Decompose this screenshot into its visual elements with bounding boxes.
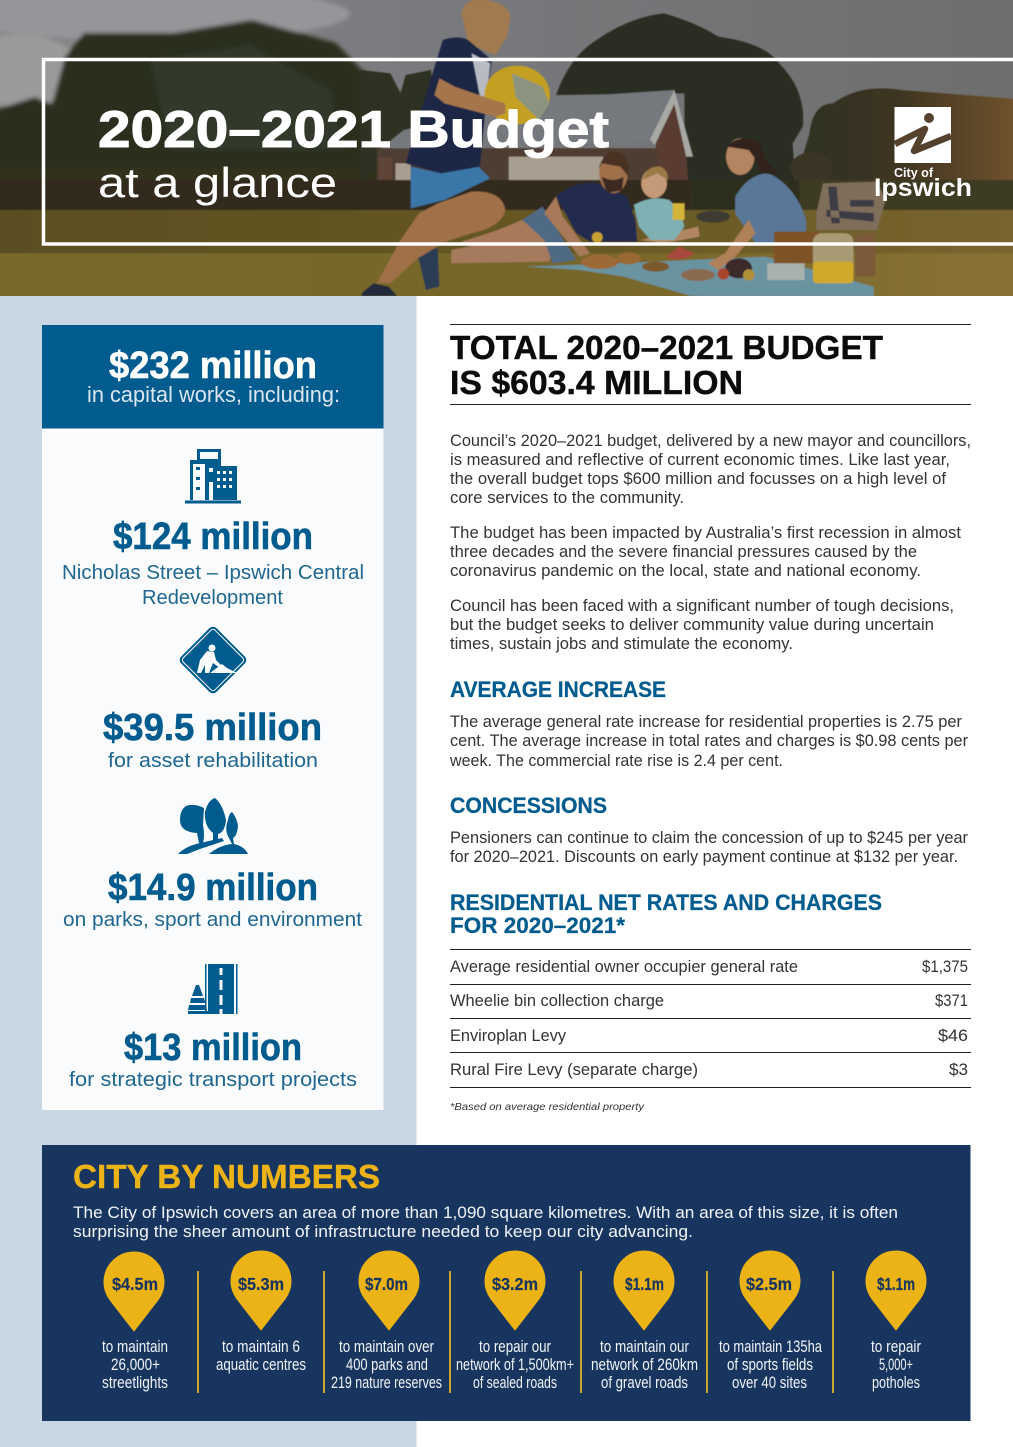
item: $124 million	[62, 516, 364, 609]
woman	[696, 211, 730, 223]
stat: gravel roads: $1.1m	[625, 1274, 664, 1294]
stat: gravel roads: of gravel roads	[601, 1373, 688, 1392]
section: concessions: Pensioners can continue to claim the concession of up to $245 per year	[450, 829, 968, 847]
panel: capital works items	[42, 428, 384, 1110]
heading: city by numbers: CITY BY NUMBERS	[73, 1158, 380, 1195]
stat: potholes: $1.1m	[877, 1274, 915, 1294]
stat: streetlights: $4.5m	[112, 1274, 158, 1294]
footnote: *Based on average residential property	[450, 1101, 645, 1113]
text block: intro paragraphs: The budget has been impacted by Australia’s first recession in almost	[450, 524, 961, 542]
item: $14.9 million: $14.9 million	[108, 867, 318, 909]
stat: sealed roads: $3.2m	[492, 1274, 538, 1294]
heading: residential net rates: FOR 2020–2021*	[450, 913, 625, 938]
text block: intro paragraphs: but the budget seeks to deliver community value during uncertain	[450, 616, 934, 634]
house gable trim	[650, 90, 693, 157]
stat: potholes: potholes	[872, 1373, 920, 1392]
section: average increase: The average general rate increase for residential properties is 2.75 per	[450, 713, 962, 731]
section: average increase: AVERAGE INCREASE	[450, 677, 666, 702]
icon: road and cone	[188, 964, 238, 1014]
logo: City of Ipswich	[874, 107, 972, 202]
house gable	[655, 104, 688, 181]
boy	[417, 248, 439, 290]
heading: total budget: TOTAL 2020–2021 BUDGET	[450, 329, 883, 366]
item: $124 million: $124 million	[113, 516, 313, 558]
icon: city buildings	[185, 449, 241, 504]
item: $124 million: Nicholas Street – Ipswich Central	[62, 561, 364, 584]
stat: gravel roads	[591, 1251, 698, 1392]
stat: streetlights: 26,000+	[111, 1355, 160, 1374]
item: $14.9 million: on parks, sport and environment	[63, 908, 362, 931]
table: rates and charges: $3	[949, 1061, 968, 1079]
logo: City of Ipswich: Ipswich	[874, 174, 972, 202]
item: $13 million	[69, 1027, 357, 1091]
left trees	[0, 20, 410, 180]
stat: sports fields: $2.5m	[746, 1274, 792, 1294]
section: average increase	[449, 677, 968, 770]
stat: streetlights: to maintain	[102, 1337, 168, 1356]
section: average increase: week. The commercial rate rise is 2.4 per cent.	[449, 752, 783, 770]
text block: intro paragraphs: coronavirus pandemic on the local, state and national economy.	[450, 562, 921, 580]
section: concessions	[450, 793, 968, 866]
hedge	[0, 172, 378, 180]
stat: potholes: to repair	[871, 1337, 921, 1356]
table: rates and charges: $371	[935, 992, 968, 1010]
section: concessions: for 2020–2021. Discounts on early payment continue at $132 per year.	[450, 848, 958, 866]
header frame	[44, 60, 1013, 244]
foreground hedge	[0, 180, 691, 210]
stat: parks and nature reserves	[331, 1251, 442, 1392]
heading: residential net rates	[450, 890, 882, 938]
man	[451, 233, 553, 263]
logo: City of Ipswich: City of	[894, 166, 934, 180]
stat: sports fields: over 40 sites	[732, 1373, 807, 1392]
item: $13 million: $13 million	[124, 1027, 302, 1069]
text block: intro paragraphs: three decades and the severe financial pressures caused by the	[450, 543, 917, 561]
photo centre, drawn at crop scale	[0, 0, 1013, 300]
item: $14.9 million	[63, 867, 362, 931]
panel: capital works header	[42, 325, 384, 428]
stat: aquatic centres: $5.3m	[238, 1274, 284, 1294]
stat: sports fields	[719, 1251, 822, 1392]
table: rates and charges: Enviroplan Levy	[450, 1027, 567, 1045]
stat: gravel roads: network of 260km	[591, 1355, 698, 1374]
food	[581, 254, 619, 269]
stat: potholes	[866, 1251, 926, 1392]
text block: intro paragraphs: core services to the community.	[450, 489, 684, 507]
house wall	[376, 148, 658, 181]
table: rates and charges: Average residential owner occupier general rate	[450, 958, 798, 976]
background trees	[360, 70, 432, 148]
stat: sealed roads: to repair our	[479, 1337, 551, 1356]
stat: sealed roads: network of 1,500km+	[456, 1355, 574, 1374]
stat: streetlights	[102, 1252, 168, 1392]
near lawn	[0, 210, 1013, 257]
stat: parks and nature reserves: 219 nature reserves	[331, 1373, 442, 1392]
section: average increase: cent. The average increase in total rates and charges is $0.98 cents per	[450, 732, 968, 750]
header photo: family picnic in park	[0, 0, 1013, 300]
heading: total budget	[450, 324, 971, 405]
child	[641, 227, 700, 243]
item: $124 million: Redevelopment	[142, 586, 283, 609]
table: rates and charges: $46	[938, 1027, 968, 1045]
stat: parks and nature reserves: to maintain over	[339, 1337, 434, 1356]
text block: intro paragraphs: Council has been faced with a significant number of tough decisions,	[450, 597, 954, 615]
stat: aquatic centres	[216, 1251, 306, 1374]
table: rates and charges: Wheelie bin collection charge	[450, 992, 664, 1010]
heading: total budget: IS $603.4 MILLION	[450, 364, 743, 401]
stat: potholes: 5,000+	[879, 1355, 913, 1374]
stat: sports fields: to maintain 135ha	[719, 1337, 822, 1356]
house roof	[379, 90, 674, 150]
hamper	[816, 182, 886, 230]
text block: intro paragraphs: is measured and reflective of current economic times. Like last year,	[450, 451, 950, 469]
table: rates and charges	[450, 949, 971, 1088]
stat: parks and nature reserves: $7.0m	[365, 1274, 408, 1294]
text block: city intro	[73, 1203, 898, 1241]
subtitle: at a glance	[98, 159, 337, 206]
stat: aquatic centres: to maintain 6	[222, 1337, 300, 1356]
stat: streetlights: streetlights	[102, 1373, 168, 1392]
item: $39.5 million	[103, 707, 322, 772]
stat: aquatic centres: aquatic centres	[216, 1355, 306, 1374]
stat: parks and nature reserves: 400 parks and	[346, 1355, 428, 1374]
stat: sealed roads: of sealed roads	[473, 1373, 557, 1392]
panel: capital works header: $232 million	[109, 345, 317, 387]
item: $39.5 million: $39.5 million	[103, 707, 322, 749]
item: $13 million: for strategic transport projects	[69, 1068, 357, 1091]
panel: city by numbers	[42, 1145, 970, 1421]
stat: gravel roads: to maintain our	[600, 1337, 689, 1356]
icon: road worker sign	[178, 625, 248, 695]
heading: residential net rates: RESIDENTIAL NET RATES AND CHARGES	[450, 890, 882, 915]
title: 2020–2021 Budget	[98, 101, 609, 159]
text block: intro paragraphs: the overall budget tops $600 million and focusses on a high level of	[450, 470, 946, 488]
item: $39.5 million: for asset rehabilitation	[108, 749, 318, 772]
icon: trees	[178, 798, 248, 854]
juice jug	[812, 232, 854, 265]
picnic blanket	[526, 257, 874, 296]
text block: city intro: surprising the sheer amount of infrastructure needed to keep our city advancing.	[73, 1222, 693, 1241]
stat: sports fields: of sports fields	[727, 1355, 813, 1374]
text block: intro paragraphs: times, sustain jobs and stimulate the economy.	[450, 635, 793, 653]
panel: capital works header: in capital works, including:	[87, 382, 340, 407]
section: concessions: CONCESSIONS	[450, 793, 607, 818]
text block: intro paragraphs	[450, 432, 971, 653]
table: rates and charges: $1,375	[922, 958, 968, 976]
text block: intro paragraphs: Council’s 2020–2021 budget, delivered by a new mayor and councillors,	[450, 432, 971, 450]
table: rates and charges: Rural Fire Levy (separate charge)	[450, 1061, 698, 1079]
text block: city intro: The City of Ipswich covers an area of more than 1,090 square kilometres. With an area of this size, it is often	[73, 1203, 898, 1222]
left column background	[0, 296, 416, 1447]
stat: sealed roads	[456, 1251, 574, 1392]
